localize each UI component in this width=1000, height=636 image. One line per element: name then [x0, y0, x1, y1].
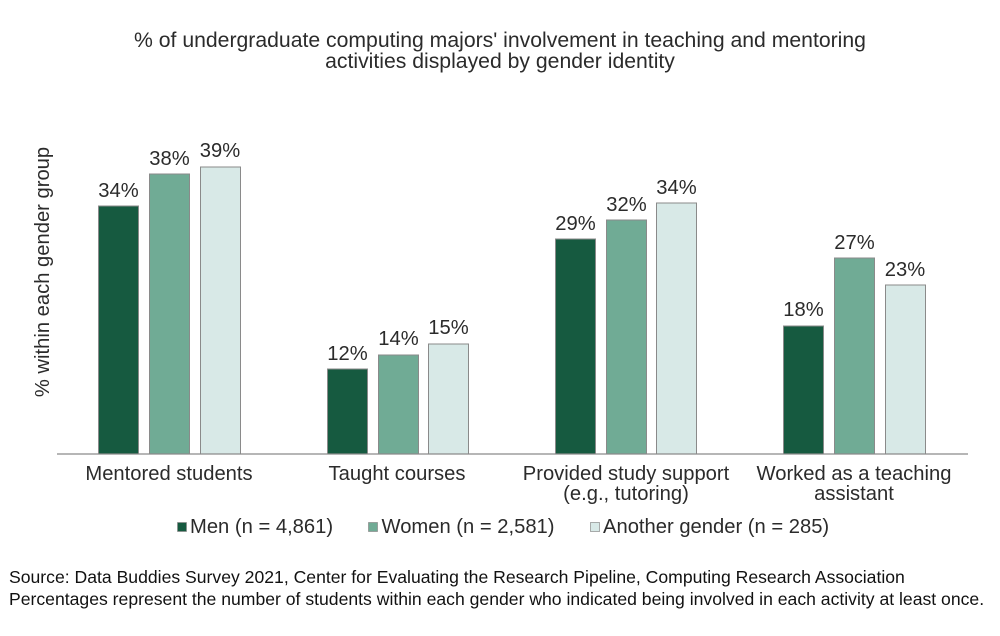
legend: Another gender (n = 285) — [603, 516, 829, 538]
value labels: 18% — [783, 299, 824, 321]
legend — [178, 516, 829, 538]
value labels: 29% — [555, 213, 596, 235]
title: activities displayed by gender identity — [325, 50, 675, 73]
bar chart — [57, 140, 968, 505]
value labels: 23% — [885, 259, 925, 281]
value labels: 27% — [834, 232, 875, 254]
category labels: Provided study support — [523, 463, 730, 485]
title — [134, 29, 866, 73]
legend: Men (n = 4,861) — [190, 516, 333, 538]
category labels: assistant — [814, 483, 894, 505]
category labels: Taught courses — [329, 463, 465, 485]
category labels: Worked as a teaching — [757, 463, 951, 485]
source note: Percentages represent the number of students within each gender who indicated being involved in each activity at least once. — [9, 589, 984, 609]
legend: Women (n = 2,581) — [382, 516, 554, 538]
value labels: 15% — [428, 317, 469, 339]
source note: Source: Data Buddies Survey 2021, Center for Evaluating the Research Pipeline, Computing Research Association — [9, 567, 905, 587]
value labels: 12% — [327, 343, 368, 365]
group: Worked as a teaching assistant — [784, 258, 926, 454]
category labels: (e.g., tutoring) — [563, 483, 689, 505]
group: Provided study support — [556, 203, 696, 454]
category labels: Mentored students — [85, 463, 253, 485]
value labels: 34% — [656, 177, 697, 199]
value labels: 38% — [149, 148, 190, 170]
value labels: 39% — [200, 140, 240, 162]
group: Taught courses — [328, 344, 468, 454]
category labels — [85, 463, 951, 505]
group: Mentored students — [98, 167, 240, 454]
value labels: 34% — [98, 180, 139, 202]
value labels: 14% — [378, 328, 419, 350]
value labels — [98, 140, 925, 365]
y axis label: % within each gender group — [32, 147, 54, 397]
value labels: 32% — [606, 194, 647, 216]
source note — [9, 567, 984, 609]
title: % of undergraduate computing majors' involvement in teaching and mentoring — [134, 29, 866, 52]
